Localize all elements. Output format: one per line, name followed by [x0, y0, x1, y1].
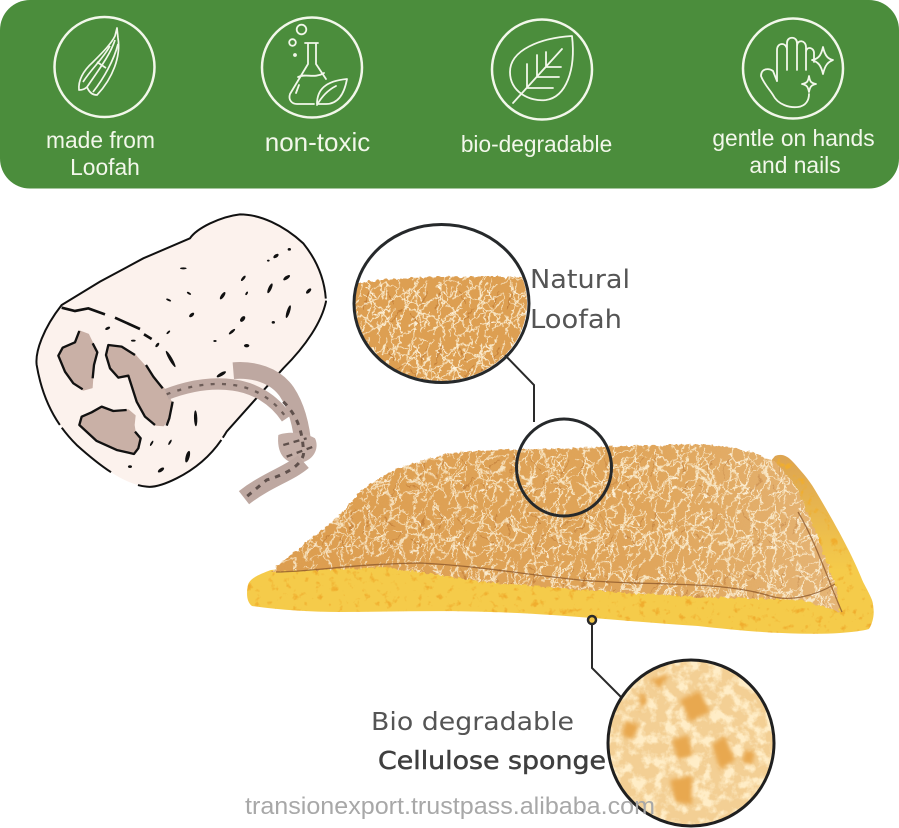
illustration: loofah cylinder with rope: [36, 214, 326, 498]
yellow cellulose sponge layer: [247, 455, 874, 634]
magnified sponge texture: [605, 658, 777, 828]
brown stitching seam: [276, 512, 842, 612]
icon: hand with sparkles: [743, 18, 843, 118]
natural loofah fibre layer: [272, 444, 840, 612]
label: Natural Loofah: Natural: [530, 265, 630, 295]
benefit: gentle on hands: [712, 18, 875, 178]
label: made from Loofah: made from: [46, 127, 155, 153]
icon: loofah pods: [54, 17, 154, 117]
benefit: non-toxic: [262, 18, 370, 157]
magnified circle ring: [608, 660, 774, 826]
banner background: [0, 0, 899, 188]
benefit: made from Loofah: [46, 17, 155, 180]
label: non-toxic: non-toxic: [265, 127, 370, 157]
connector with dot: [588, 616, 622, 698]
magnified circle ring: [354, 224, 529, 382]
magnifier on sponge: [516, 419, 612, 516]
loofah body: [36, 214, 326, 487]
connector line: [500, 350, 534, 422]
hole 1: [58, 331, 97, 390]
rope: [167, 370, 317, 498]
label: made from Loofah: Loofah: [70, 154, 140, 180]
end-cap edge: [62, 308, 152, 339]
green benefits banner: [0, 0, 899, 188]
benefit: bio-degradable: [461, 20, 612, 157]
watermark: transionexport.trustpass.alibaba.com: [245, 793, 655, 820]
icon: flask with leaf: [262, 18, 362, 118]
label: Bio degradable: Bio degradable: [371, 707, 574, 736]
magnified loofah fibres: [356, 276, 527, 381]
label: gentle on hands and nails: and nails: [749, 152, 841, 178]
callout: cellulose sponge: [371, 616, 777, 828]
callout: natural loofah: [350, 220, 630, 516]
hole 3: [79, 407, 141, 453]
icon: leaf: [492, 20, 592, 120]
hole 2: [106, 345, 173, 426]
label: Natural Loofah: Loofah: [530, 305, 622, 335]
surface pores: [105, 248, 312, 473]
label: Cellulose sponge: Cellulose sponge: [378, 746, 606, 775]
label: gentle on hands and nails: gentle on hands: [712, 125, 875, 151]
photo: loofah and cellulose sponge pad: [247, 425, 874, 634]
label: bio-degradable: bio-degradable: [461, 131, 612, 157]
